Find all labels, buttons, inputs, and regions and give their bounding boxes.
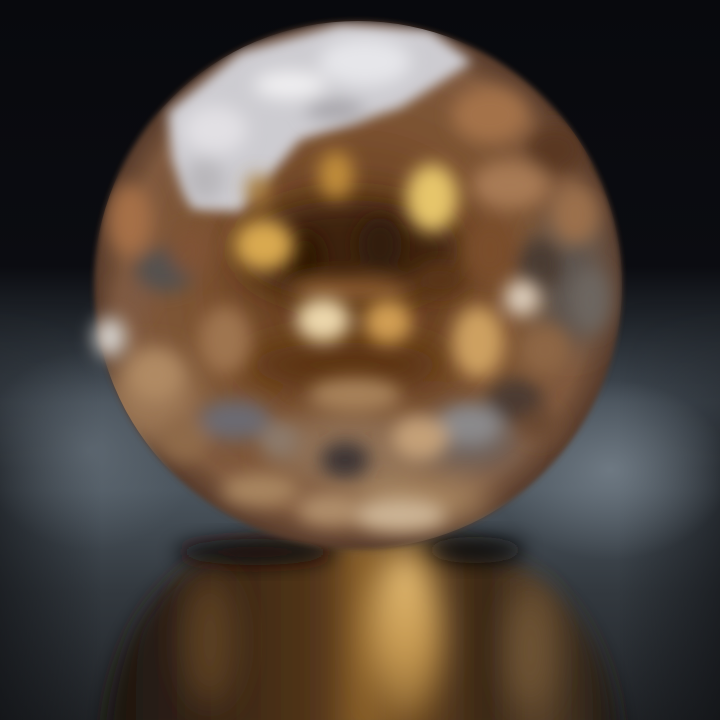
golden reflection <box>369 550 441 720</box>
facets <box>100 24 610 531</box>
background side shading <box>0 352 720 720</box>
diamond body <box>94 21 622 549</box>
background left glow <box>4 377 156 520</box>
reflection base <box>105 537 620 720</box>
shadow right under gem <box>425 537 525 563</box>
background right glow <box>523 396 716 546</box>
white facet highlights <box>183 38 411 202</box>
shadow under gem <box>175 539 335 565</box>
left reflection streak <box>184 575 236 705</box>
right reflection streak <box>508 590 552 710</box>
white upper facet <box>168 24 472 212</box>
gold highlights <box>94 151 540 378</box>
background <box>0 283 720 720</box>
